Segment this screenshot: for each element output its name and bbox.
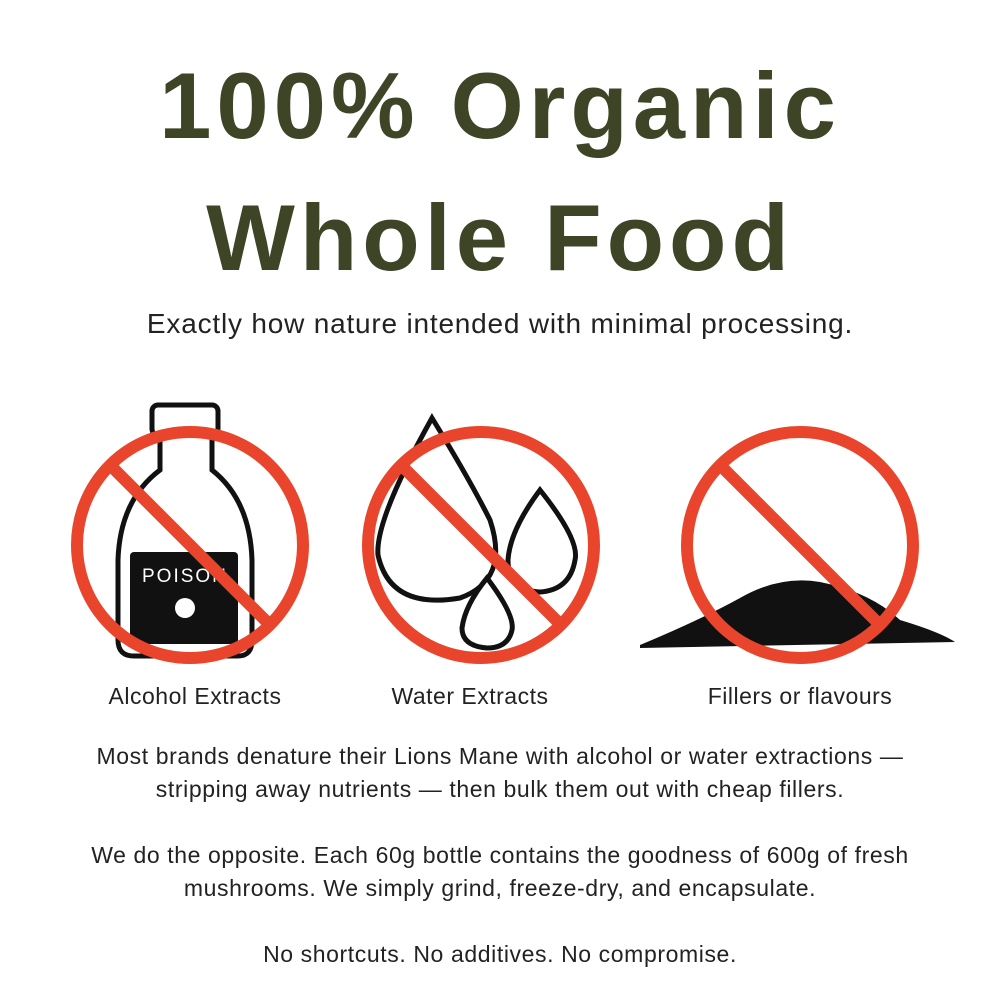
body text: No shortcuts. No additives. No compromise. xyxy=(263,941,737,967)
subtitle: Exactly how nature intended with minimal processing. xyxy=(147,308,853,339)
body text: mushrooms. We simply grind, freeze-dry, and encapsulate. xyxy=(184,875,816,901)
icon: prohibition signs xyxy=(77,432,913,658)
icon: water drops xyxy=(378,418,576,648)
icon: poison bottle: POISON xyxy=(142,566,228,587)
body text: We do the opposite. Each 60g bottle contains the goodness of 600g of fresh xyxy=(91,842,909,868)
title xyxy=(159,53,841,290)
body text: Most brands denature their Lions Mane with alcohol or water extractions — xyxy=(96,743,904,769)
label: alcohol: Alcohol Extracts xyxy=(109,683,281,709)
body text xyxy=(91,743,909,967)
title: Whole Food xyxy=(206,185,794,290)
icon: poison bottle xyxy=(118,405,252,656)
icon: filler pile xyxy=(640,580,955,648)
label: water: Water Extracts xyxy=(392,683,548,709)
body text: stripping away nutrients — then bulk them out with cheap fillers. xyxy=(156,776,844,802)
label: fillers: Fillers or flavours xyxy=(708,683,892,709)
title: 100% Organic xyxy=(159,53,841,158)
